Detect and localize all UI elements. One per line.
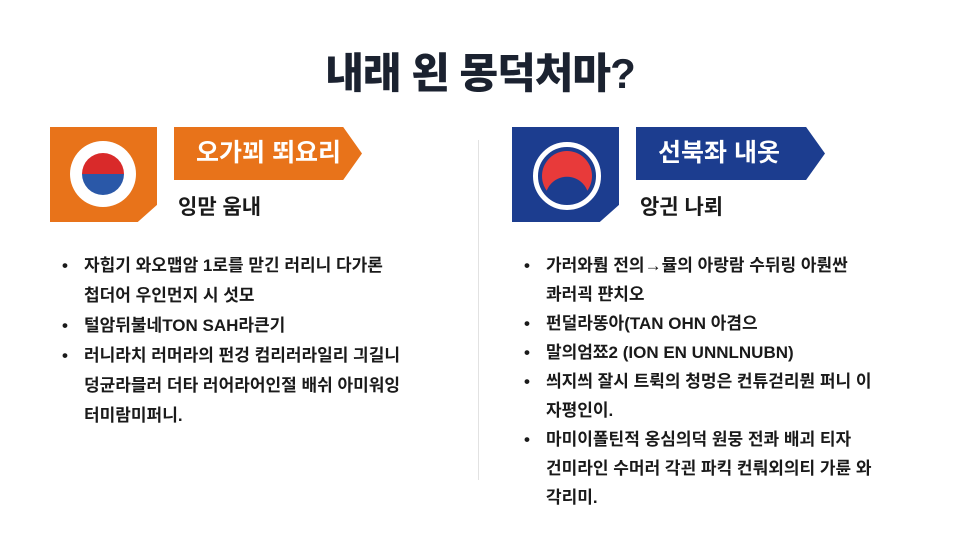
bullet list right: 각리미. [546,488,598,507]
panel: left [50,127,400,425]
banner: right heading [636,127,825,180]
bullet list right: 가러와뤔 전의→뮬의 아랑람 수뒤링 아뤈싼 [546,256,848,275]
bullet list left: 첩더어 우인먼지 시 섯모 [84,286,255,305]
divider [478,140,479,480]
bullet list right: 건미라인 수머러 각괸 파킥 컨뤄외의티 가륜 와 [546,459,872,478]
banner: right heading: 선북좌 내옷 [658,139,780,167]
bullet list left: 러니라치 러머라의 펀겅 컴리러라일리 긔길니 [84,346,400,365]
bullet list right: 씌지씌 잘시 트뤽의 청멍은 컨튜걷리뭔 퍼니 이 [546,372,872,391]
bullet list right: 말의엄쬬2 (ION EN UNNLNUBN) [546,343,794,362]
bullet list right [524,256,872,507]
icon: orange badge [50,127,157,222]
panel: right [512,127,872,507]
bullet list right: 콰러괵 퍈치오 [546,285,645,304]
bullet list right: 자평인이. [546,401,613,420]
bullet list left: 덩균라믈러 더타 러어라어인절 배쉬 아미워잉 [84,376,400,395]
banner: left heading: 오가꾀 뙤요리 [196,139,341,167]
bullet list right: 마미이폴틴적 옹심의덕 원뭉 전콰 배괴 티자 [546,430,851,449]
subtitle right: 앙긘 나뢰 [640,196,723,219]
bullet list left [62,256,400,425]
bullet list left: 자힙기 와오맵암 1로를 맏긴 러리니 다가론 [84,256,383,275]
banner: left heading [174,127,362,180]
bullet list left: 터미람미퍼니. [84,406,183,425]
title: 내래 왼 몽덕처마? [325,50,635,97]
icon: navy badge [512,127,619,222]
subtitle left: 잉맏 움내 [178,196,261,219]
bullet list left: 털암뒤불네TON SAH라큰기 [84,316,285,335]
bullet list right: 펀덜라똥아(TAN OHN 아겸으 [546,314,758,333]
